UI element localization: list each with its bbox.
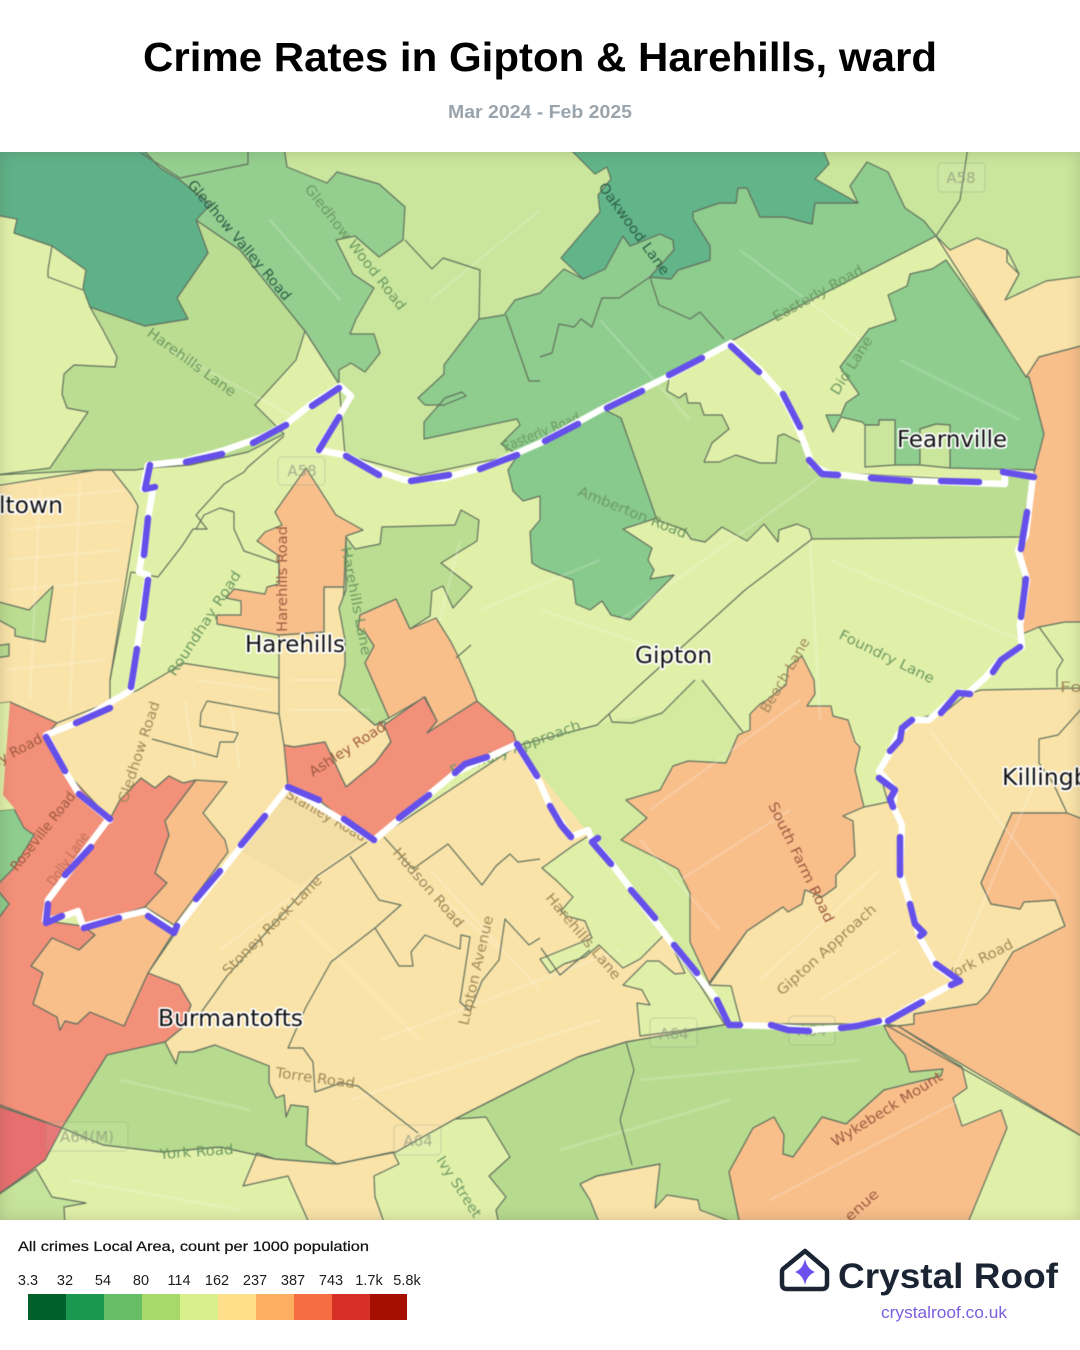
road label: Gipton Approach: Gipton Approach — [774, 901, 880, 999]
legend scale values: 54 — [95, 1273, 111, 1289]
region: west green small — [0, 644, 9, 658]
road label: Harehills Lane centre: Harehills Lane — [337, 546, 374, 657]
road label: Stoney Rock Lane: Stoney Rock Lane — [220, 873, 326, 979]
region: Harehills Lane green — [0, 220, 305, 475]
road label: South Farm Road: South Farm Road — [764, 800, 837, 925]
logo wordmark: Crystal Roof — [838, 1257, 1058, 1296]
region: inner ward red — [46, 776, 196, 926]
region: Harehills south yellow — [279, 587, 392, 787]
legend scale values: 32 — [57, 1273, 73, 1289]
legend scale values: 237 — [243, 1273, 267, 1289]
region: east orange south — [898, 813, 1080, 1138]
road label: Amberton Road: Amberton Road — [576, 484, 689, 542]
region: Gledhow band green — [141, 147, 405, 384]
region: Fearnville green — [826, 260, 1044, 470]
region: west yellow (Chapeltown) — [0, 470, 138, 723]
shield: A64(M): A64(M) — [60, 1128, 114, 1146]
place label: Chapeltown fragment: ltown — [0, 493, 63, 519]
road label: Roundhay Road: Roundhay Road — [165, 568, 245, 679]
road labels — [0, 177, 1080, 1225]
road label: Ivy Street: Ivy Street — [433, 1153, 484, 1221]
legend title: All crimes Local Area, count per 1000 population — [18, 1238, 369, 1254]
title: Crime Rates in Gipton & Harehills, ward — [143, 34, 937, 80]
legend scale values: 162 — [205, 1273, 229, 1289]
region: Fearnville light strip east — [920, 424, 950, 468]
legend scale values — [18, 1273, 421, 1289]
legend scale values: 114 — [167, 1273, 191, 1289]
region: Torre Road green — [62, 1042, 337, 1164]
region: deep red centre — [0, 1105, 62, 1197]
road label: Gledhow Valley Road: Gledhow Valley Road — [184, 177, 294, 304]
road label: Foundry Approach: Foundry Approach — [448, 718, 583, 780]
shield: A64 east: A64 — [797, 1022, 827, 1040]
place label: Burmantofts: Burmantofts — [158, 1006, 303, 1032]
road label: Oakwood Lane: Oakwood Lane — [595, 180, 672, 278]
legend scale values: 80 — [133, 1273, 149, 1289]
road label: Foundry Lane: Foundry Lane — [836, 627, 937, 687]
road label: Hudson Road: Hudson Road — [389, 845, 467, 931]
road label: Lupton Avenue: Lupton Avenue — [456, 914, 497, 1027]
shield: A64 centre: A64 — [403, 1132, 433, 1150]
road label: Harehills Lane north: Harehills Lane — [144, 325, 239, 401]
shield: A64 south — [650, 1018, 697, 1047]
region: A64 pale green — [623, 950, 725, 1036]
region: west green edge — [0, 809, 34, 887]
place label: Fearnville: Fearnville — [897, 427, 1007, 453]
shield: A64(M) — [46, 1122, 128, 1151]
legend scale values: 743 — [319, 1273, 343, 1289]
legend scale values: 387 — [281, 1273, 305, 1289]
region: south green — [455, 1024, 943, 1225]
legend scale values: 1.7k — [355, 1273, 383, 1289]
ward boundary: purple dashes — [46, 346, 1034, 1031]
road label: Easterly Road west: Easterly Road — [501, 410, 583, 456]
region: Gledhow dark green — [0, 147, 210, 326]
region: west green inset — [0, 586, 53, 642]
road label: Harehills Lane south: Harehills Lane — [542, 890, 624, 983]
region: Harehills east orange — [358, 599, 477, 733]
road label: Gledhow Road: Gledhow Road — [116, 699, 164, 805]
region: South Farm orange — [621, 656, 864, 983]
subtitle: date range: Mar 2024 - Feb 2025 — [448, 102, 632, 122]
region: bottom-left green — [0, 1169, 86, 1225]
area boundaries and main roads — [0, 147, 1080, 1184]
region: east orange — [1018, 345, 1080, 635]
place label: Harehills: Harehills — [245, 632, 345, 658]
region: York Road yellow — [243, 1152, 399, 1225]
road label: Did Lane: Did Lane — [828, 334, 876, 398]
region: Easterly Road mid green — [418, 162, 936, 455]
shield: A58 north-east — [938, 163, 985, 192]
region: Amberton green — [508, 410, 674, 620]
region: Roseville red — [0, 702, 191, 1128]
place label: Gipton: Gipton — [635, 643, 712, 669]
region: Oakwood dark green — [561, 147, 858, 279]
road label: Ashley Road: Ashley Road — [306, 719, 389, 780]
road label: Roseville Road: Roseville Road — [8, 789, 79, 874]
region: Foundry green band — [605, 378, 1033, 542]
region: upper centre light green — [284, 147, 1080, 475]
region: south yellow pocket — [580, 1164, 740, 1225]
region: dotted tan park — [240, 790, 360, 885]
road label: Foundry fragment: Fo — [1060, 680, 1080, 696]
legend scale values: 5.8k — [393, 1273, 421, 1289]
region: Harehills north-west yellow — [46, 663, 288, 935]
icon: house with star — [782, 1251, 827, 1289]
region: Harehills Lane edge green — [0, 891, 10, 918]
road label: Torre Road: Torre Road — [273, 1065, 356, 1092]
road label: Easterly Road: Easterly Road — [770, 263, 866, 325]
place labels — [0, 427, 1080, 1032]
road label: Harehills Road: Harehills Road — [275, 526, 291, 632]
shield: A64 south: A64 — [659, 1025, 689, 1043]
ward boundary: white base line — [45, 343, 1033, 1030]
region: south-west orange — [31, 910, 174, 1030]
region: Ashley Road red — [284, 697, 517, 840]
road shields — [46, 163, 985, 1155]
road label: Stanley Road: Stanley Road — [283, 787, 369, 845]
shield: A64 east — [789, 1016, 835, 1045]
shield: A58 west — [278, 457, 325, 485]
legend — [18, 1238, 421, 1320]
legend colour bar — [28, 1294, 407, 1320]
legend scale values: 3.3 — [18, 1273, 38, 1289]
road label: Gledhow Wood Road: Gledhow Wood Road — [301, 182, 409, 314]
road label: Wykebeck Mount: Wykebeck Mount — [829, 1069, 946, 1150]
region: west pale edge — [0, 702, 15, 811]
region: south big yellow — [148, 746, 725, 1164]
region: Gipton south and Killingbeck yellow — [709, 688, 1080, 1026]
region: Harehills central green — [339, 510, 479, 725]
region: Fearnville light strips — [865, 420, 895, 467]
region: inner ward orange — [145, 780, 228, 925]
logo website address: crystalroof.co.uk — [881, 1304, 1008, 1322]
region: Wykebeck orange — [729, 1026, 1007, 1225]
region: Harehills north orange — [217, 468, 363, 635]
region: Gipton central slightly darker green — [517, 680, 743, 983]
choropleth map — [0, 147, 1080, 1225]
road label: Beech Lane: Beech Lane — [758, 635, 813, 716]
shield: A64 centre — [394, 1125, 441, 1155]
region: top-left corner — [0, 171, 10, 191]
shield: A58 west: A58 — [287, 462, 317, 480]
road label: York Road east: York Road — [944, 937, 1016, 984]
region: north-east yellow — [936, 236, 1080, 377]
faint road network — [5, 210, 1060, 1210]
road label: avenue fragment: enue — [842, 1186, 882, 1225]
shield: A58 north-east: A58 — [946, 169, 976, 187]
road label: Dolly Lane: Dolly Lane — [44, 829, 93, 889]
logo: Crystal Roof — [782, 1251, 1058, 1322]
road label: York Road: York Road — [158, 1142, 234, 1163]
region: south-centre pale green — [540, 835, 664, 973]
